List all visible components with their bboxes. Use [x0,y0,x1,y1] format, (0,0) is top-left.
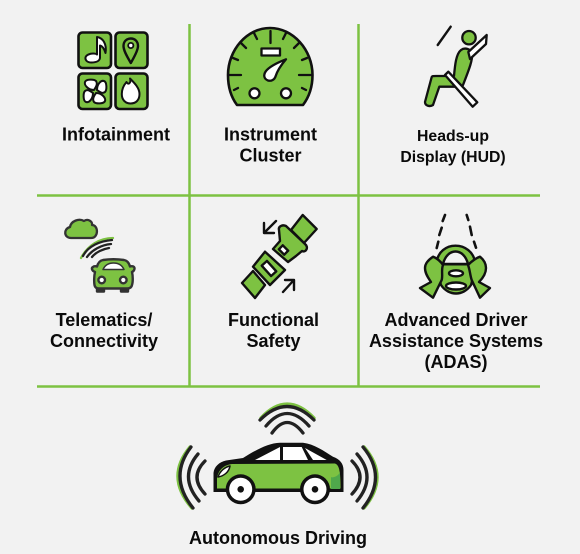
icon: fan [84,80,106,103]
icon: connected car [92,259,134,292]
icon: buckled seat belt [242,215,317,298]
icon: autonomous car [178,404,377,508]
heading: Heads-up Display (HUD): Heads-up [417,128,489,145]
icon: cloud [65,220,97,238]
heading: Functional Safety: Safety [246,331,301,351]
icon: signal arcs [81,238,113,258]
car body [214,443,344,492]
wheels [226,474,256,504]
left signal arcs [178,447,205,508]
icon: seated person with seat belt [425,27,487,107]
heading: Heads-up Display (HUD): Display (HUD) [400,149,506,166]
top signal arcs [260,404,314,433]
heading: Advanced Driver Assistance Systems (ADAS): Assistance Systems [369,331,543,351]
heading: Advanced Driver Assistance Systems (ADAS): Advanced Driver [384,310,528,330]
heading: Telematics/ Connectivity: Connectivity [50,331,158,351]
icon: infotainment tiles [78,32,148,109]
right signal arcs [352,447,377,508]
icon: music note [85,37,106,62]
heading: Functional Safety: Functional [228,310,319,330]
icon: instrument cluster gauge [228,28,312,105]
icon: flame [122,78,140,104]
heading: Instrument Cluster: Cluster [239,146,302,166]
icon: map pin [124,38,138,63]
heading: Telematics/ Connectivity: Telematics/ [56,310,152,330]
heading: Advanced Driver Assistance Systems (ADAS): (ADAS) [424,352,488,372]
icon: hands on steering wheel [420,215,490,298]
heading: Infotainment: Infotainment [62,124,170,144]
heading: Instrument Cluster: Instrument [224,124,317,144]
heading: Autonomous Driving: Autonomous Driving [189,528,367,548]
